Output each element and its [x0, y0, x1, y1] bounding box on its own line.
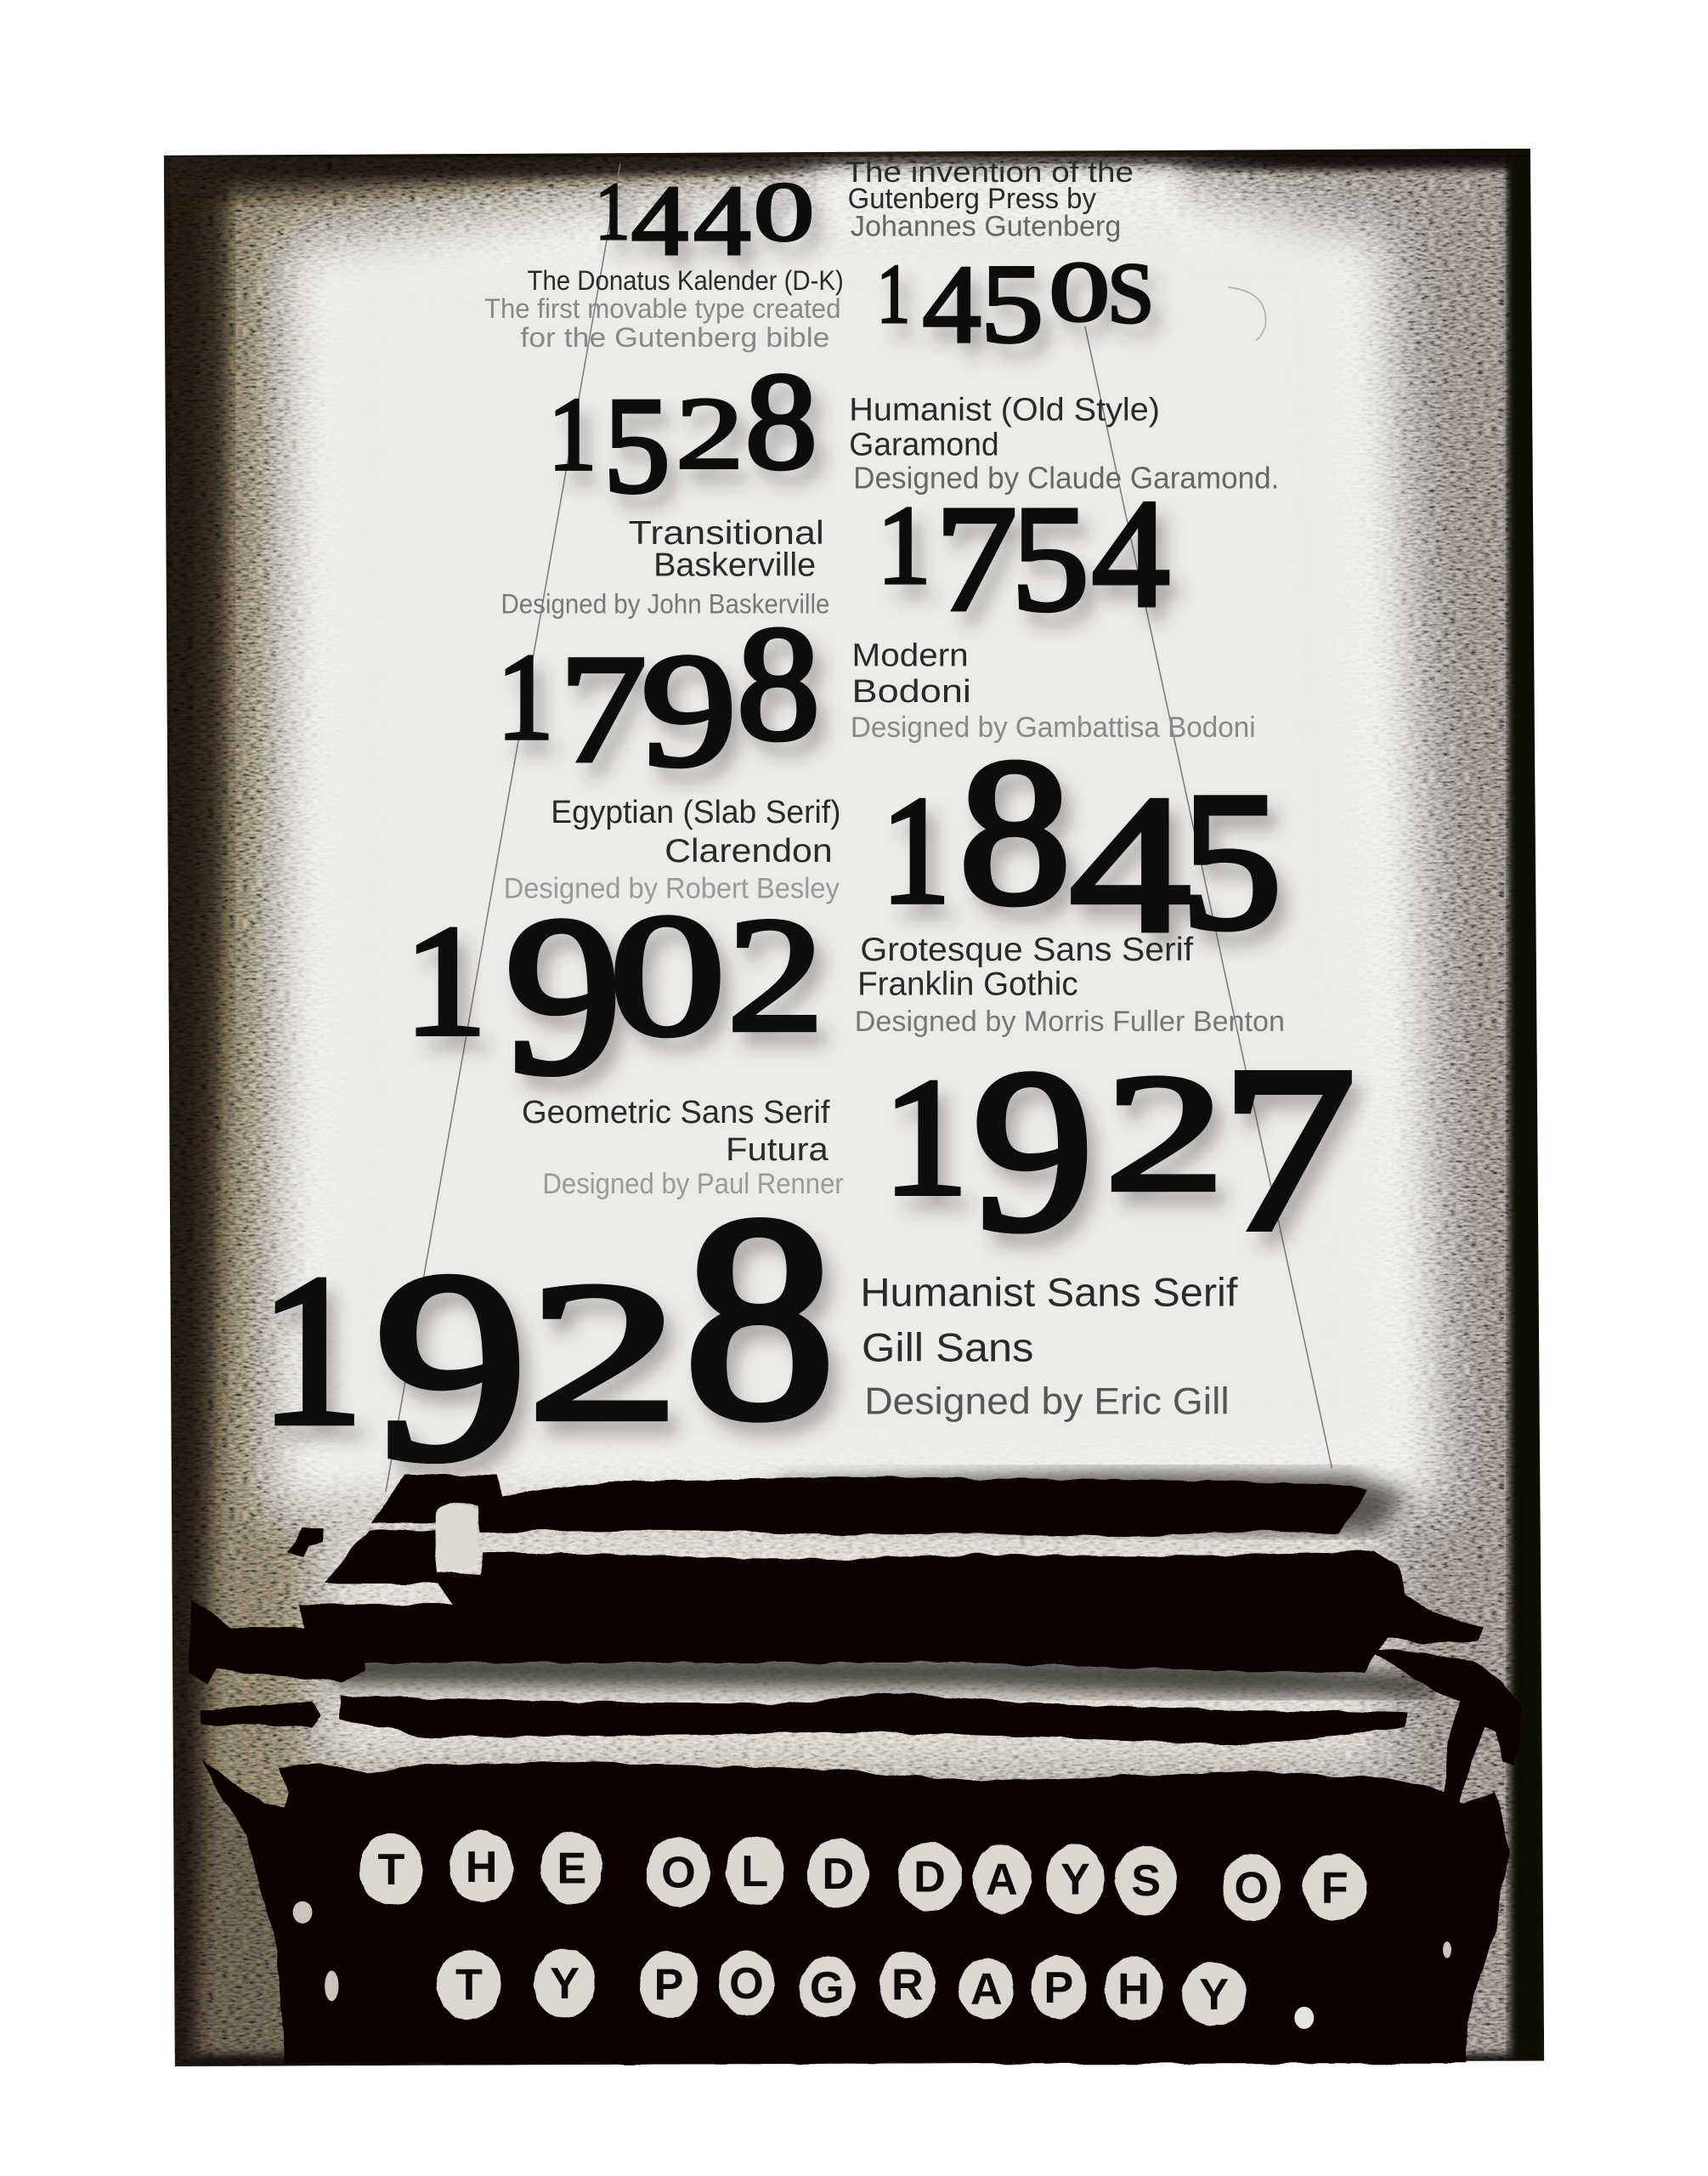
key D: D	[913, 1852, 946, 1901]
caption: Futura 1927: Geometric Sans Serif	[522, 1094, 830, 1130]
key P: P	[1043, 1964, 1073, 2013]
caption: Bodoni 1798: Modern	[852, 638, 969, 673]
caption: Donatus Kalender 1450s: The first movable type created	[484, 292, 840, 324]
year 1528: 1	[548, 377, 597, 492]
year 1845: 1	[881, 766, 950, 936]
caption: Donatus Kalender 1450s: The Donatus Kalender (D-K)	[528, 264, 844, 296]
year 1902: 1	[404, 893, 487, 1068]
caption: Bodoni 1798	[851, 638, 1256, 744]
year 1754	[877, 469, 1169, 643]
year 1754: 7	[936, 475, 1017, 643]
key Y: Y	[1060, 1856, 1090, 1905]
caption: Franklin Gothic 1902: Grotesque Sans Serif	[860, 932, 1193, 968]
year 1450s: 1	[877, 246, 910, 341]
year 1440	[596, 164, 814, 276]
caption: Donatus Kalender 1450s	[484, 264, 844, 353]
period key	[1294, 2007, 1314, 2029]
dark smudge behind the carriage	[777, 1471, 1408, 1533]
caption: Futura 1927: Designed by Paul Renner	[542, 1168, 844, 1200]
key F	[1303, 1854, 1366, 1921]
year 1927: 2	[1105, 1040, 1225, 1226]
key S: S	[1131, 1856, 1161, 1906]
key T: T	[455, 1961, 483, 2010]
key Y: Y	[1199, 1970, 1229, 2020]
caption: Gutenberg press 1440: The invention of the	[845, 156, 1134, 189]
year 1845	[881, 716, 1282, 972]
key S	[1116, 1845, 1177, 1915]
key P	[1031, 1955, 1086, 2020]
year 1450s: 5	[981, 241, 1043, 366]
key P: P	[654, 1961, 683, 2010]
caption: Baskerville 1754: Baskerville	[653, 547, 816, 584]
year 1754: 4	[1092, 469, 1169, 639]
key R: R	[891, 1961, 924, 2010]
year 1528: 5	[603, 369, 670, 521]
key E: E	[557, 1844, 586, 1894]
typewriter body	[201, 1760, 1509, 2064]
year 1798: 9	[641, 621, 737, 801]
key O: O	[661, 1848, 696, 1897]
key D	[897, 1842, 962, 1911]
year 1798: 7	[559, 625, 647, 795]
year 1798	[497, 592, 820, 801]
caption: Gill Sans 1928: Humanist Sans Serif	[860, 1270, 1238, 1315]
year 1902	[404, 870, 824, 1120]
pencil guide lines	[386, 164, 1332, 1492]
key Y	[1046, 1844, 1105, 1913]
year 1440: 1	[596, 166, 630, 257]
caption: Gill Sans 1928: Designed by Eric Gill	[864, 1381, 1230, 1423]
caption: Clarendon 1845: Clarendon	[665, 833, 833, 870]
key D	[807, 1839, 868, 1908]
caption: Gutenberg press 1440: Gutenberg Press by	[848, 183, 1097, 215]
page panel: dark background with vignette	[153, 144, 1554, 2066]
key A	[973, 1844, 1031, 1913]
key R	[879, 1952, 936, 2018]
typewriter silhouette	[188, 1471, 1524, 2064]
title keys row 1: THE OLD DAYS OF	[359, 1830, 1366, 1921]
year 1928	[259, 1156, 835, 1516]
year 1845: 4	[1070, 756, 1191, 972]
key O	[1222, 1854, 1281, 1921]
year 1928: 2	[528, 1243, 680, 1462]
poster	[163, 148, 1545, 2066]
ink blot left of the carriage	[286, 1528, 322, 1557]
year 1528: 8	[745, 345, 817, 498]
year 1440: 4	[693, 166, 750, 276]
caption: Clarendon 1845	[504, 794, 840, 904]
key O: O	[1234, 1863, 1269, 1912]
caption: Franklin Gothic 1902	[855, 932, 1285, 1038]
year 1927	[882, 1019, 1355, 1280]
typewriter main block	[188, 1529, 1485, 1685]
key L: L	[741, 1847, 768, 1896]
key Y	[534, 1948, 596, 2018]
caption: Gill Sans 1928	[860, 1270, 1238, 1423]
platen bar short	[201, 1702, 322, 1728]
year 1927: 7	[1221, 1019, 1355, 1280]
key O	[719, 1952, 774, 2015]
key Y	[1182, 1963, 1246, 2026]
caption: Garamond 1528: Humanist (Old Style)	[849, 392, 1160, 428]
platen bar long	[340, 1693, 1408, 1746]
caption: Clarendon 1845: Egyptian (Slab Serif)	[551, 794, 840, 830]
key O	[647, 1838, 710, 1907]
key Y: Y	[550, 1959, 580, 2009]
key E	[541, 1832, 602, 1904]
small light flecks on the body	[293, 1901, 1451, 2001]
year 1798: 8	[737, 592, 820, 774]
year 1902: 0	[609, 879, 726, 1072]
key T	[437, 1950, 501, 2020]
key T: T	[378, 1845, 405, 1895]
key A: A	[986, 1856, 1018, 1905]
caption: Franklin Gothic 1902: Designed by Morris Fuller Benton	[855, 1006, 1285, 1038]
caption: Baskerville 1754: Transitional	[629, 515, 824, 552]
key A	[959, 1958, 1015, 2020]
caption: Gill Sans 1928: Gill Sans	[862, 1326, 1033, 1371]
year 1902: 2	[727, 883, 824, 1065]
year 1528: 2	[676, 377, 744, 490]
year 1927: 1	[882, 1044, 969, 1230]
key G: G	[810, 1964, 844, 2013]
caption: Garamond 1528: Garamond	[849, 427, 999, 462]
year 1798: 1	[497, 630, 554, 766]
year 1754: 1	[877, 483, 931, 608]
caption: Donatus Kalender 1450s: for the Gutenberg bible	[520, 321, 829, 353]
year 1927: 9	[973, 1022, 1094, 1278]
key H: H	[466, 1843, 497, 1892]
caption: Franklin Gothic 1902: Franklin Gothic	[857, 966, 1078, 1003]
year 1928: 9	[375, 1216, 528, 1516]
year 1928: 1	[259, 1230, 364, 1469]
caption: Bodoni 1798: Designed by Gambattisa Bodoni	[851, 711, 1256, 744]
key O: O	[729, 1959, 764, 2009]
key H	[1105, 1957, 1162, 2020]
year 1528	[548, 345, 817, 521]
caption: Clarendon 1845: Designed by Robert Besley	[504, 872, 840, 904]
grainy shadow under the block	[333, 1652, 1436, 1696]
carriage top bar	[372, 1476, 1366, 1538]
year 1845: 5	[1180, 752, 1282, 971]
key G	[800, 1957, 855, 2018]
key P	[640, 1952, 698, 2018]
key D: D	[822, 1850, 854, 1899]
year 1440: 4	[631, 166, 688, 276]
year 1928: 8	[684, 1156, 835, 1479]
key H	[450, 1830, 513, 1902]
caption: Baskerville 1754	[501, 515, 829, 620]
caption: Gutenberg press 1440	[845, 156, 1134, 243]
caption: Futura 1927: Futura	[726, 1131, 829, 1167]
caption: Baskerville 1754: Designed by John Baskerville	[501, 588, 829, 620]
caption: Futura 1927	[522, 1094, 844, 1200]
year 1450s: 0	[1049, 244, 1110, 339]
year 1845: 8	[959, 716, 1072, 948]
year 1450s	[877, 241, 1154, 366]
caption: Garamond 1528	[849, 392, 1279, 496]
year 1902: 9	[505, 870, 622, 1120]
year 1754: 5	[1011, 475, 1089, 643]
key T	[359, 1833, 423, 1906]
caption: Gutenberg press 1440: Johannes Gutenberg	[851, 211, 1121, 243]
caption: Garamond 1528: Designed by Claude Garamond.	[853, 461, 1279, 496]
year 1450s: S	[1107, 246, 1154, 341]
year 1440: 0	[754, 164, 814, 258]
key H: H	[1117, 1965, 1150, 2014]
title keys row 2: TYPOGRAPHY	[437, 1948, 1246, 2026]
caption: Bodoni 1798: Bodoni	[852, 673, 971, 709]
key L	[726, 1836, 784, 1906]
key A: A	[970, 1965, 1003, 2014]
key F: F	[1321, 1863, 1349, 1912]
light key behind carriage	[436, 1505, 478, 1570]
right arm	[1366, 1649, 1524, 1804]
year 1450s: 4	[923, 244, 981, 366]
